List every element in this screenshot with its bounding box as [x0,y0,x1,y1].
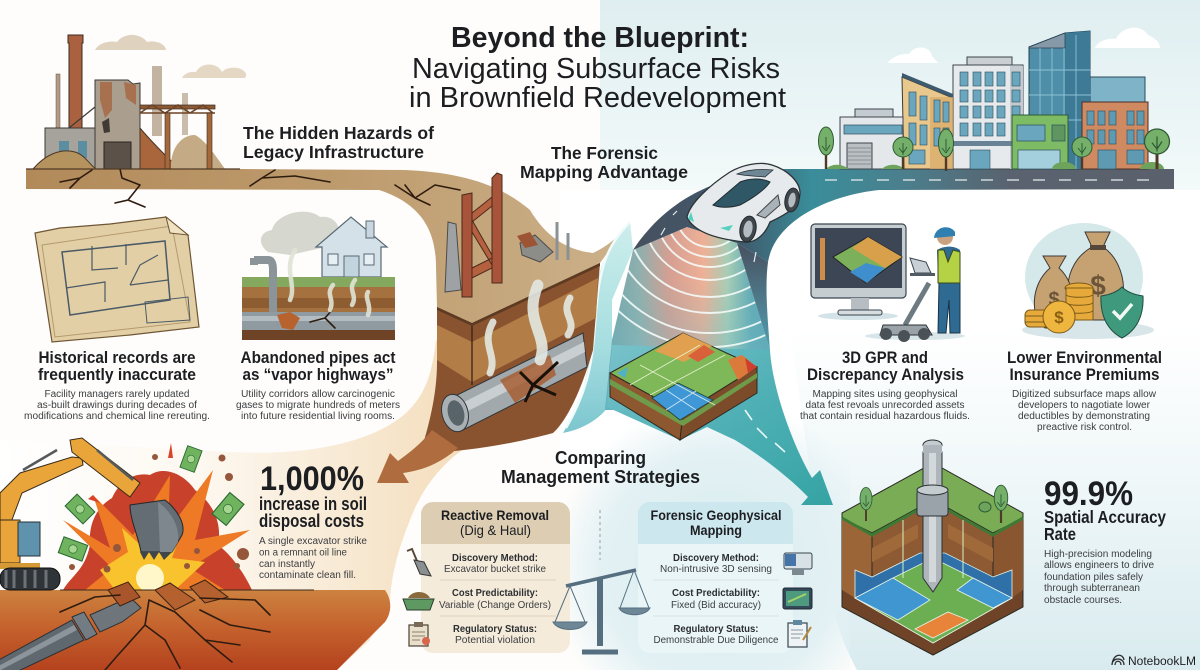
panel: reactive removal card: Reactive Removal [441,507,549,523]
heading: forensic mapping: Mapping Advantage [520,162,688,182]
stat: 1000 percent: 1,000% [260,460,364,498]
illustration: derelict factory [26,35,330,207]
text block: historical records: Facility managers rarely updated [44,389,190,400]
text block: insurance premiums: Digitized subsurface maps allow [1012,389,1157,400]
panel: geophysical mapping card: Cost Predictability: [672,587,760,599]
panel: geophysical mapping card: Demonstrable Due Diligence [654,634,779,646]
title: in Brownfield Redevelopment [409,82,786,114]
stat: 1000 percent: contaminate clean fill. [259,570,356,581]
stat: 99.9 percent: Rate [1044,524,1076,544]
stat: 1000 percent [259,460,367,581]
vapor plumes [488,285,571,373]
panel: reactive removal card: Variable (Change Orders) [439,599,551,611]
text block: insurance premiums: deductibles by demonstrating [1018,411,1150,422]
panel: geophysical mapping card: Fixed (Bid accuracy) [671,599,761,611]
illustration: vapor pipe and house [242,212,395,340]
stat: 99.9 percent: High-precision modeling [1044,549,1152,560]
heading: hidden hazards: Legacy Infrastructure [243,142,424,162]
panel: cream hazard zone [0,340,500,670]
icon: shovel [407,549,431,576]
text block: abandoned pipes: as “vapor highways” [242,365,394,384]
illustration: money and shield: $ [1090,270,1106,301]
stat: 99.9 percent: allows engineers to drive [1044,560,1154,571]
icon: balance scale [553,570,650,652]
icon: dumpster [403,592,434,610]
illustration: autonomous survey car [687,163,801,243]
icon: tablet [783,588,812,609]
text block: 3D GPR: that contain residual hazardous fluids. [800,411,970,422]
broken pipe [0,597,141,670]
text block: abandoned pipes: Abandoned pipes act [240,348,396,367]
arrow: teal flow to foundation [607,345,833,505]
text block: abandoned pipes: Utility corridors allow carcinogenic [241,389,395,400]
text block: 3D GPR [800,348,970,422]
text block: abandoned pipes [236,348,400,422]
panel: geophysical mapping card: Regulatory Status: [674,623,758,635]
text block: insurance premiums: Lower Environmental [1007,348,1162,367]
heading: comparing strategies: Management Strategies [501,466,700,487]
text block: insurance premiums: developers to nagotiate lower [1018,400,1151,411]
stat: 1000 percent: increase in soil [259,494,367,514]
flying banknotes [58,446,244,561]
panel: geophysical mapping card: Mapping [690,522,742,538]
rusted frame [445,173,568,297]
text block: historical records: Historical records are [38,348,196,367]
panel: reactive removal card: Regulatory Status: [453,623,537,635]
panel: geophysical mapping card: Forensic Geophysical [650,507,782,523]
title [409,22,786,114]
stat: 1000 percent: can instantly [259,559,315,570]
panel: geophysical mapping card [638,502,793,653]
panel: reactive removal card: Cost Predictability: [452,587,538,599]
title: Beyond the Blueprint: [451,22,749,54]
heading: hidden hazards: The Hidden Hazards of [243,123,434,143]
illustration: old blueprint [35,217,199,342]
heading: hidden hazards [243,123,434,162]
illustration: redeveloped city [818,28,1170,171]
illustration: money and shield [1022,223,1154,339]
text block: historical records [24,348,210,422]
heading: forensic mapping: The Forensic [551,143,658,163]
panel: geophysical mapping card: Non-intrusive 3D sensing [660,563,772,575]
illustration: money and shield: $ [1054,308,1064,327]
illustration: money and shield: $ [1048,289,1060,311]
stat: 1000 percent: disposal costs [259,511,364,531]
arrow: brown flow to cost [377,430,458,483]
illustration: GPR operator and monitor [811,224,965,342]
illustration: isometric subsurface map [610,333,757,440]
illustration: excavator strike [0,438,390,670]
icon: violation clipboard [409,622,430,646]
icon: compliance clipboard [788,620,811,647]
stat: 1000 percent: A single excavator strike [259,536,367,547]
panel: reactive removal card: Discovery Method: [452,552,538,564]
excavator arm [0,438,140,590]
stat: 99.9 percent: obstacle courses. [1044,595,1122,606]
illustration: pile through subsurface model [842,440,1023,655]
stat: 99.9 percent: through subterranean [1044,583,1140,594]
divider: strategy split [599,510,601,560]
text block: insurance premiums: Insurance Premiums [1010,365,1160,384]
text block: 3D GPR: data fest revoals unrecorded assets [806,400,964,411]
icon: 3D sensor [784,553,812,575]
panel: geophysical mapping card: Discovery Method: [673,552,759,564]
illustration: soil block with pipe [395,173,600,453]
text block: abandoned pipes: into future residential living rooms. [241,411,395,422]
text block: abandoned pipes: gases to migrate hundreds of meters [236,400,400,411]
heading: comparing strategies [501,447,700,487]
stat: 99.9 percent: foundation piles safely [1044,572,1143,583]
heading: forensic mapping [520,143,688,182]
text block: historical records: as-built drawings during decades of [37,400,197,411]
text block: insurance premiums [1007,348,1162,433]
text block: insurance premiums: preactive risk control. [1037,422,1132,433]
panel: crescent scan edge [563,222,633,433]
text block: historical records: modifications and chemical line rereuting. [24,411,210,422]
heading: comparing strategies: Comparing [555,447,646,468]
panel: reactive removal card: Potential violation [455,634,535,646]
panel: reactive removal card [421,502,570,653]
text block: 3D GPR: Discrepancy Analysis [807,365,964,384]
panel: reactive removal card: (Dig & Haul) [460,522,531,538]
text block: 3D GPR: Mapping sites using geophysical [812,389,958,400]
pipe [438,333,587,435]
stat: 99.9 percent: 99.9% [1044,475,1133,513]
panel: legacy ground path [26,169,630,323]
road: future road [633,169,1174,350]
stat: 99.9 percent: Spatial Accuracy [1044,507,1166,527]
text block: historical records: frequently inaccurate [38,365,196,384]
logo: NotebookLM: NotebookLM [1128,656,1196,668]
stat: 1000 percent: on a remnant oil line [259,548,347,558]
title: Navigating Subsurface Risks [412,53,780,85]
illustration: sonar cone [605,227,770,410]
text block: 3D GPR: 3D GPR and [842,348,928,367]
excavator bucket [130,500,183,552]
panel: reactive removal card: Excavator bucket strike [444,563,546,575]
stat: 99.9 percent [1044,475,1166,606]
